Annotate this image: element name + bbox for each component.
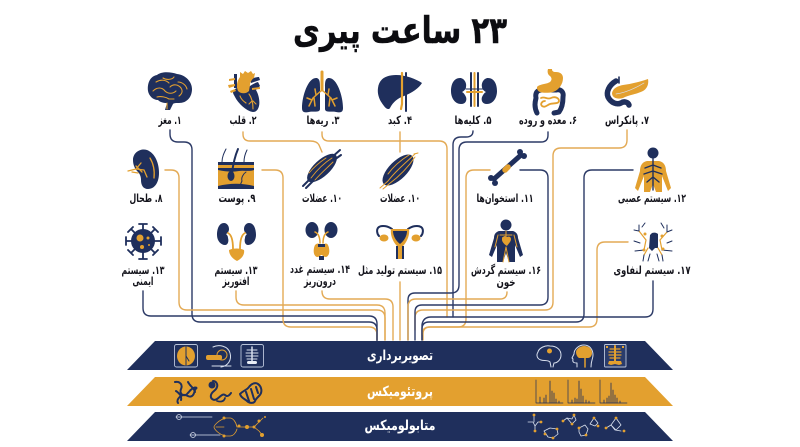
organ: muscle [303, 149, 341, 188]
icon: MRI scanner [206, 346, 231, 367]
label: lungs: ۳. ریه‌ها [306, 113, 340, 127]
label: circulatory system: ۱۶. سیستم گردش [471, 263, 541, 277]
label: endocrine system: ۱۴. سیستم غدد [290, 262, 350, 276]
organ: reproductive system [377, 226, 423, 259]
label: urinary system [214, 263, 258, 289]
label: circulatory system: خون [496, 275, 516, 290]
label: urinary system: ۱۳. سیستم [214, 263, 258, 277]
connector lines [143, 130, 653, 342]
icon: head with brain [572, 345, 593, 367]
label: endocrine system: درون‌ریز [303, 274, 336, 289]
icon: chest X-ray [241, 344, 264, 367]
organ: lungs [302, 72, 343, 112]
organ: heart [228, 71, 260, 112]
label: lymphatic system: ۱۷. سیستم لنفاوی [614, 263, 690, 278]
organ: pancreas [607, 77, 648, 105]
label: urinary system: افتوریز [222, 274, 250, 289]
label: muscle second: ۱۰. عضلات [380, 191, 420, 205]
label: circulatory system [471, 263, 541, 290]
label: kidneys: ۵. کلیه‌ها [454, 113, 492, 127]
label: spleen: ۸. طحال [130, 191, 162, 205]
label: bone: ۱۱. استخوان‌ها [476, 191, 534, 206]
imaging heading: تصویربرداری [367, 348, 433, 364]
label: immune system: ایمنی [132, 274, 154, 288]
label: nervous system: ۱۲. سیستم عصبی [618, 191, 686, 205]
label: brain: ۱. مغز [158, 113, 182, 127]
organ: muscle second [377, 149, 419, 191]
label: muscle: ۱۰. عضلات [302, 191, 342, 205]
title: ۲۳ ساعت پیری [293, 9, 507, 52]
organ: circulatory system [489, 220, 523, 262]
icon: protein structures [175, 381, 261, 403]
organ: kidneys [451, 73, 497, 106]
label: stomach and intestine: ۶. معده و روده [519, 113, 577, 128]
organ: liver [378, 73, 422, 111]
icon: molecules [528, 414, 625, 439]
organ: immune cell virus [126, 224, 161, 259]
panel: imaging band [127, 341, 673, 370]
label: heart: ۲. قلب [230, 113, 256, 127]
organ: spleen [128, 149, 159, 189]
organ: urinary system [217, 223, 256, 261]
label: liver: ۴. کبد [388, 113, 412, 127]
organ: stomach and intestine [535, 69, 563, 113]
label: pancreas: ۷. پانکراس [605, 113, 649, 127]
panel: proteomics band [127, 377, 673, 406]
organ: endocrine system [306, 222, 338, 260]
organ: brain [148, 72, 192, 110]
diagram: metabolic pathway [176, 414, 266, 438]
organ: skin [218, 149, 254, 189]
label: reproductive system: ۱۵. سیستم تولید مثل [358, 263, 442, 278]
organ: bone [488, 149, 527, 186]
proteomics heading: پروتئومیکس [367, 384, 433, 400]
label: immune system [122, 263, 164, 288]
icon: spine X-ray [604, 344, 626, 367]
organ: lymphatic system [634, 223, 672, 261]
chart: mass spectrum peaks [536, 380, 627, 403]
panel: metabolomics band [127, 412, 673, 441]
organ: nervous system [635, 148, 671, 192]
label: endocrine system [290, 262, 350, 289]
label: immune system: ۱۳. سیستم [122, 263, 164, 277]
icon: brain scan frame [174, 344, 198, 367]
icon: brain outline [537, 346, 561, 367]
label: skin: ۹. پوست [218, 191, 256, 206]
metabolomics heading: متابولومیکس [364, 418, 436, 434]
